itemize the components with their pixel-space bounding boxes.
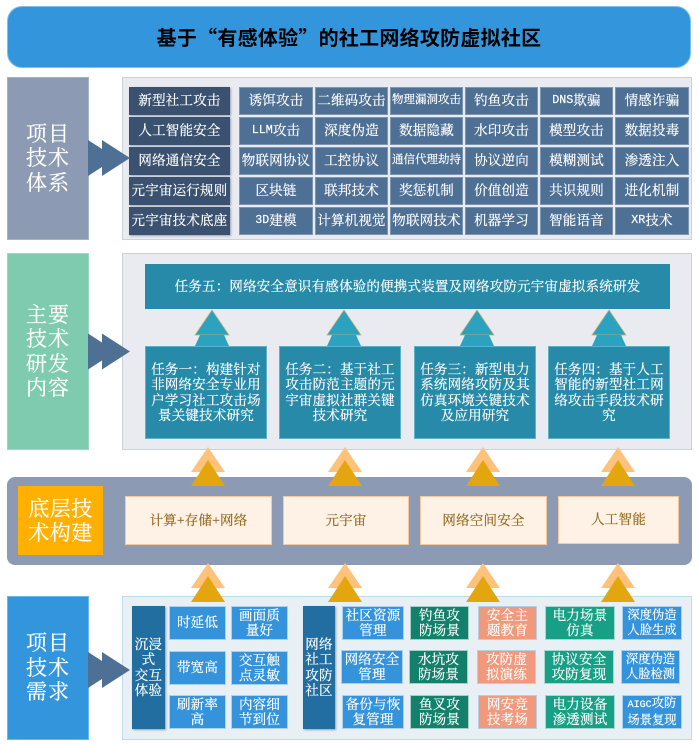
technology system grid: 进化机制: [625, 183, 679, 198]
arrow: research to tasks: [88, 334, 130, 370]
foundation: 网络空间安全: 网络空间安全: [442, 513, 525, 528]
technology system grid: 二维码攻击: [317, 93, 386, 108]
task four: 智能的新型社工网: [554, 377, 664, 392]
social engineering community group: 水坑攻: [418, 652, 459, 666]
immersive experience group: 点灵敏: [239, 668, 280, 683]
arrow: system to grid: [88, 140, 130, 176]
social engineering community group: AIGC攻防: [628, 696, 676, 710]
social engineering community group: 人脸生成: [627, 623, 677, 637]
social engineering community group: 管理: [358, 667, 386, 682]
arrow: needs to foundation four: [601, 563, 635, 602]
arrow: needs to foundation two: [328, 563, 362, 602]
technology system row labels: 新型社工攻击: [138, 93, 221, 108]
social engineering community group: 社区资源: [346, 608, 400, 622]
technology system grid: 智能语音: [549, 213, 604, 228]
technology system row labels: 元宇宙技术底座: [132, 213, 227, 228]
social engineering community group: 网络安全: [345, 652, 399, 666]
social engineering community group: 攻防: [305, 668, 333, 682]
technology system grid: 数据投毒: [625, 123, 679, 138]
task two: [279, 346, 401, 439]
arrow: foundation to task three: [466, 447, 500, 486]
section label: 主要技术研发内容: 研发: [26, 352, 70, 376]
social engineering community group: 攻防虚: [486, 652, 527, 666]
social engineering community group: 鱼叉攻: [419, 696, 460, 712]
immersive experience group: 交互: [135, 668, 162, 682]
title banner: [7, 6, 691, 68]
technology system grid: 机器学习: [474, 213, 529, 228]
immersive experience group: 节到位: [239, 712, 280, 727]
section label: 项目技术需求: [7, 596, 89, 740]
social engineering community group: [302, 606, 682, 732]
social engineering community group: 防场景: [419, 712, 460, 727]
technology system row labels: 网络通信安全: [138, 153, 221, 168]
social engineering community group: 安全主: [487, 608, 528, 622]
technology system row labels: 元宇宙运行规则: [132, 183, 227, 198]
technology system grid: 工控协议: [324, 153, 379, 168]
social engineering community group: 题教育: [487, 623, 528, 638]
technology system grid: 技术: [645, 213, 673, 228]
technology system grid: 通信代理劫持: [392, 154, 461, 166]
technology system grid: 建模: [269, 213, 297, 228]
social engineering community group: 管理: [359, 623, 387, 638]
immersive experience group: 内容细: [239, 696, 280, 712]
technology system grid: 计算机视觉: [317, 213, 386, 228]
social engineering community group: 场景复现: [627, 713, 677, 727]
section label: 底层技术构建 band: [7, 477, 692, 565]
title banner: 基于“有感体验”的社工网络攻防虚拟社区: [157, 22, 541, 51]
task three: 任务三：新型电力: [420, 362, 530, 376]
technology system grid: [239, 87, 689, 235]
section label: 项目技术体系: 技术: [26, 146, 70, 170]
immersive experience group: 时延低: [177, 615, 218, 630]
technology system grid: 钓鱼攻击: [474, 93, 529, 108]
technology system grid: 诱饵攻击: [249, 93, 303, 108]
technology system grid: 协议逆向: [474, 153, 529, 168]
social engineering community group: 防场景: [419, 623, 460, 638]
task two: 攻击防范主题的元: [285, 377, 395, 392]
technology system grid: 物理漏洞攻击: [392, 94, 461, 106]
foundation: 人工智能: 人工智能: [591, 512, 646, 527]
social engineering community group: 防场景: [418, 667, 459, 682]
technology system grid: 水印攻击: [474, 123, 529, 138]
task four: 络攻击手段技术研: [554, 392, 664, 408]
immersive experience group: 沉浸: [135, 636, 162, 652]
heading: 底层技术构建: 底层技: [28, 496, 93, 520]
technology system grid: 模型攻击: [549, 123, 604, 138]
technology system grid: 情感诈骗: [625, 93, 679, 108]
social engineering community group: 网安竞: [487, 696, 528, 712]
foundation: 计算+存储+网络: [125, 496, 272, 545]
section label: 主要技术研发内容: 主要: [26, 302, 70, 326]
task one: 非网络安全专业用: [151, 377, 261, 392]
foundation: 计算+存储+网络: 计算+存储+网络: [150, 513, 247, 528]
arrow: task three up: [460, 310, 494, 346]
section label: 项目技术需求: 项目: [26, 631, 70, 655]
technology system grid: DNS: [552, 93, 573, 107]
task four: 究: [602, 408, 616, 423]
technology system grid: XR: [631, 213, 645, 227]
task one: 户学习社工攻击场: [151, 392, 261, 408]
arrow: task four up: [592, 310, 626, 346]
technology system grid: LLM: [252, 123, 273, 137]
immersive experience group: 量好: [246, 623, 273, 638]
heading: 底层技术构建: [18, 486, 103, 555]
task two: 任务二：基于社工: [285, 362, 395, 376]
task three: [414, 346, 536, 439]
heading: 底层技术构建: 术构建: [28, 520, 93, 544]
social engineering community group: 人脸检测: [626, 667, 675, 681]
section label: 项目技术需求: 技术: [26, 656, 70, 680]
section label: 项目技术体系: [7, 77, 89, 240]
arrow: needs to foundation one: [191, 563, 225, 602]
task three: 及应用研究: [441, 408, 509, 423]
task two: 宇宙虚拟社群关键: [285, 392, 395, 408]
immersive experience group: 高: [191, 712, 204, 727]
immersive experience group: 刷新率: [177, 696, 218, 712]
technology system grid: 区块链: [255, 183, 297, 198]
immersive experience group: 式: [142, 652, 155, 667]
technology system grid: 渗透注入: [625, 153, 679, 168]
arrow: needs to panel: [88, 652, 130, 688]
task three: 系统网络攻防及其: [420, 377, 530, 392]
social engineering community group: 电力设备: [553, 696, 607, 712]
technology system grid: 模糊测试: [549, 153, 604, 168]
arrow: foundation to task one: [191, 447, 225, 486]
social engineering community group: 备份与恢: [346, 696, 400, 712]
arrow: task two up: [327, 310, 361, 346]
foundation: 元宇宙: 元宇宙: [325, 513, 367, 528]
technology system grid: 深度伪造: [324, 123, 379, 138]
arrow: task one up: [195, 310, 229, 346]
technology system grid: 物联网协议: [242, 153, 310, 168]
social engineering community group: 钓鱼攻: [419, 608, 460, 622]
immersive experience group: [132, 606, 288, 732]
arrow: foundation to task four: [601, 447, 635, 486]
arrow: needs to foundation three: [466, 563, 500, 602]
social engineering community group: 攻防复现: [552, 667, 606, 682]
social engineering community group: 社工: [305, 652, 333, 667]
technology system grid: 奖惩机制: [399, 183, 454, 198]
task four: 任务四：基于人工: [554, 362, 664, 376]
technology system grid: 物联网技术: [392, 213, 461, 228]
technology system grid: 攻击: [273, 123, 300, 138]
social engineering community group: 电力场景: [553, 608, 607, 622]
foundation: 人工智能: [558, 496, 679, 544]
social engineering community group: 渗透测试: [553, 712, 607, 727]
technology system grid: 共识规则: [549, 183, 604, 198]
section label: 主要技术研发内容: 内容: [26, 376, 70, 400]
social engineering community group: 协议安全: [552, 652, 606, 666]
social engineering community group: 拟演练: [486, 667, 527, 682]
task three: 仿真环境关键技术: [420, 392, 530, 408]
task one: [145, 346, 267, 439]
section label: 项目技术体系: 项目: [26, 122, 70, 146]
technology system grid: 数据隐藏: [399, 123, 454, 138]
section label: 主要技术研发内容: 技术: [26, 327, 70, 351]
social engineering community group: 深度伪造: [627, 608, 677, 622]
panel: research content: [122, 253, 692, 450]
section label: 项目技术需求: 需求: [26, 680, 70, 704]
social engineering community group: 技考场: [487, 712, 528, 727]
foundation: 元宇宙: [283, 496, 409, 545]
technology system row labels: [128, 86, 232, 238]
section label: 项目技术体系: 体系: [26, 171, 70, 195]
immersive experience group: 带宽高: [177, 660, 218, 675]
technology system grid: 联邦技术: [324, 183, 379, 198]
social engineering community group: 社区: [305, 683, 333, 698]
task four: [548, 346, 670, 439]
social engineering community group: 网络: [305, 636, 333, 652]
social engineering community group: 深度伪造: [626, 652, 675, 666]
foundation: 网络空间安全: [420, 496, 547, 545]
task one: 景关键技术研究: [158, 408, 254, 423]
immersive experience group: 体验: [135, 683, 162, 698]
social engineering community group: 仿真: [566, 623, 594, 638]
task one: 任务一：构建针对: [151, 362, 261, 376]
technology system row labels: 人工智能安全: [138, 123, 221, 138]
task two: 技术研究: [313, 408, 367, 423]
panel: requirements: [122, 596, 692, 740]
social engineering community group: 复管理: [352, 712, 394, 727]
technology system grid: 欺骗: [573, 93, 601, 108]
immersive experience group: 交互触: [239, 652, 280, 668]
section label: 主要技术研发内容: [7, 253, 89, 450]
panel: technology system: [122, 77, 692, 240]
task five: [145, 264, 670, 309]
arrow: foundation to task two: [328, 447, 362, 486]
task five: 任务五：网络安全意识有感体验的便携式装置及网络攻防元宇宙虚拟系统研发: [175, 279, 640, 294]
technology system grid: 3D: [255, 213, 269, 227]
immersive experience group: 画面质: [239, 608, 280, 622]
technology system grid: 价值创造: [474, 183, 529, 198]
